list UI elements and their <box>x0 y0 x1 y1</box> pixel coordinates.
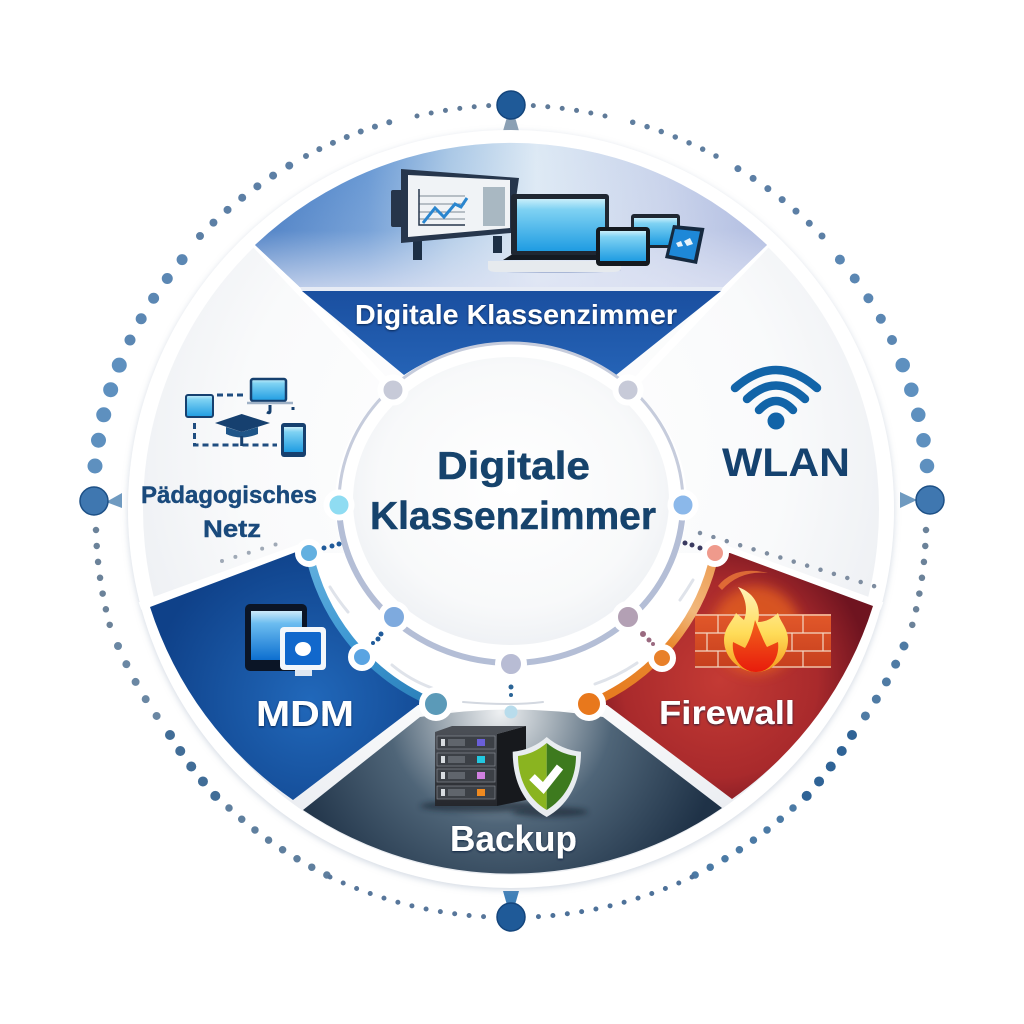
label: Backup: Backup <box>450 818 577 859</box>
panel: Pädagogisches Netz <box>141 379 317 543</box>
panel: MDM <box>150 552 436 800</box>
wedge banner <box>302 291 721 375</box>
wedge background <box>150 552 436 800</box>
wedge background <box>255 143 767 291</box>
divider lines <box>140 238 882 606</box>
arc: orange <box>589 553 715 704</box>
white band around centre <box>305 345 717 718</box>
centre circle <box>339 343 683 663</box>
faint slivers in white band <box>330 580 693 704</box>
label: Pädagogisches Netz: Pädagogisches <box>141 482 317 509</box>
dots: upper left arc <box>95 106 491 466</box>
title: Digitale <box>437 445 590 488</box>
node: bottom <box>497 891 525 931</box>
arc: blue <box>309 553 436 704</box>
label: Digitale Klassenzimmer: Digitale Klassenzimmer <box>355 299 677 330</box>
icon: brick wall with flame <box>695 586 831 674</box>
swoosh <box>718 571 768 590</box>
dotted seams above side wedges <box>222 533 877 587</box>
node ring: inner <box>326 378 696 677</box>
panel: top wedge Digitale Klassenzimmer <box>255 143 767 375</box>
title: Klassenzimmer <box>370 495 656 538</box>
dots: lower left arc <box>96 530 490 917</box>
connector nodes <box>298 378 726 718</box>
tablets <box>596 214 680 266</box>
icon: server <box>420 726 540 812</box>
dots: lower right arc <box>532 530 926 917</box>
node: right <box>900 486 944 514</box>
panel: Firewall <box>589 553 873 799</box>
icon: mobile device management <box>245 604 326 676</box>
node: left <box>80 487 122 515</box>
icon: shield with check <box>512 737 588 817</box>
phone <box>665 225 704 264</box>
node ring: outer <box>298 542 726 718</box>
main disc <box>128 130 894 888</box>
panel: WLAN <box>722 370 850 485</box>
icon: classroom devices <box>391 169 704 273</box>
label: MDM: MDM <box>256 693 354 734</box>
centre fill <box>353 357 669 645</box>
compass nodes <box>80 91 944 931</box>
label: Firewall: Firewall <box>659 694 795 731</box>
icon: network with graduation cap <box>186 379 306 457</box>
panel: Backup <box>303 710 722 874</box>
smartboard <box>391 169 519 260</box>
wedge background <box>589 553 873 799</box>
node: top <box>497 91 525 131</box>
dots: upper right arc <box>531 106 927 466</box>
label: WLAN: WLAN <box>722 441 850 485</box>
wedge background <box>303 710 722 874</box>
label: Pädagogisches Netz: Netz <box>203 516 261 543</box>
small link dots <box>322 540 702 718</box>
white outer ring <box>128 130 894 888</box>
coloured link arcs <box>309 553 715 704</box>
sector background <box>143 143 879 875</box>
ring shadow <box>339 343 683 663</box>
icon: wifi <box>735 370 817 430</box>
outer dotted ring <box>95 106 927 917</box>
laptop <box>488 194 621 273</box>
